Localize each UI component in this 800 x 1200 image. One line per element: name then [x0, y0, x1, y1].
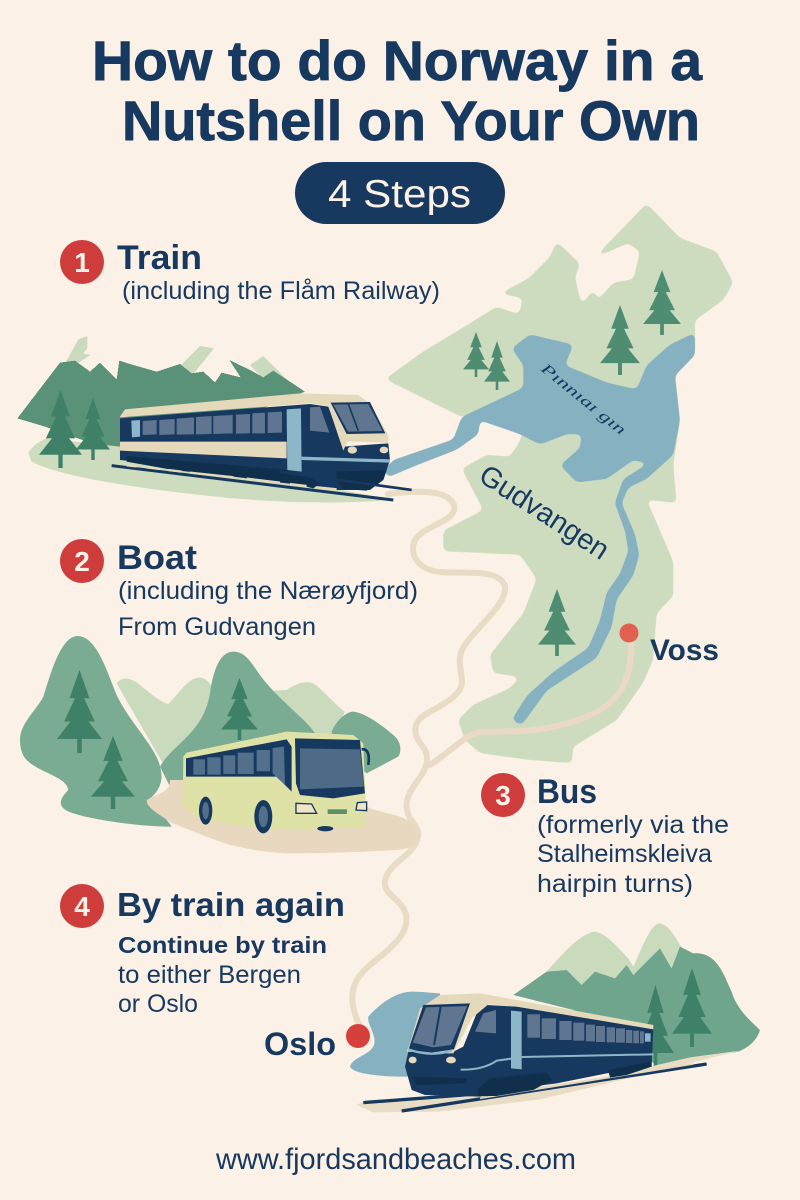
- hills and road: [20, 636, 420, 853]
- marker: Oslo: [264, 1024, 370, 1062]
- number badge 1: 1: [74, 247, 90, 278]
- roof: [407, 993, 653, 1053]
- step 4: By train again: [60, 884, 345, 1018]
- rails: [363, 1094, 477, 1103]
- door: [287, 408, 302, 472]
- title: [92, 29, 703, 152]
- marker: Voss: Voss: [650, 634, 719, 667]
- step 2 heading: Boat: [117, 539, 197, 577]
- body: [405, 1005, 653, 1097]
- step 1 description: (including the Flåm Railway): [122, 277, 440, 305]
- train: [112, 393, 412, 500]
- windshield: [295, 738, 365, 798]
- roof: [120, 393, 388, 451]
- step 2: Boat: [60, 539, 418, 641]
- step 1 heading: Train: [117, 239, 202, 277]
- headlights and grille: [296, 803, 317, 813]
- rails: [112, 465, 412, 500]
- train: [357, 993, 740, 1112]
- stripe: [120, 442, 287, 458]
- bus: [183, 732, 369, 833]
- scene: bus: [20, 636, 420, 853]
- map trees: [463, 270, 681, 656]
- wheels: [199, 797, 212, 825]
- windows: [143, 407, 329, 435]
- step 3 heading: Bus: [537, 773, 597, 811]
- windscreen: [408, 1003, 470, 1053]
- badge: 4 Steps: 4 Steps: [328, 173, 471, 216]
- number badge 4: 4: [74, 891, 90, 922]
- number badge 2: 2: [74, 546, 90, 577]
- map land: [385, 203, 733, 763]
- website url: www.fjordsandbeaches.com: [215, 1143, 576, 1176]
- marker: Oslo: Oslo: [264, 1026, 336, 1062]
- trees: [39, 390, 110, 468]
- mountains: [17, 336, 393, 502]
- step 4 description: Continue by train: [118, 932, 327, 958]
- number badge 3: [481, 773, 525, 817]
- headlights: [348, 446, 357, 454]
- badge: 4 Steps: [295, 162, 505, 224]
- number badge 3: 3: [495, 780, 511, 811]
- mirror: [362, 749, 369, 765]
- label: Gudvangen: Gudvangen: [473, 459, 615, 566]
- number badge 2: [60, 539, 104, 583]
- headlights: [409, 1057, 417, 1063]
- scene: train 1: [17, 336, 412, 502]
- number badge 4: [60, 884, 104, 928]
- lake label: Pınnıaɪ gın: [536, 360, 628, 439]
- trees: [637, 968, 712, 1067]
- map: fjord region: [383, 203, 733, 763]
- step 2 description: [118, 577, 418, 641]
- step 3 description: hairpin turns): [537, 870, 693, 898]
- step 4 heading: By train again: [117, 886, 345, 923]
- step 3 description: Stalheimskleiva: [537, 840, 712, 868]
- title: Nutshell on Your Own: [122, 89, 700, 152]
- step 1: Train: [60, 239, 440, 305]
- step 4 description: [118, 932, 327, 1018]
- map river and lake: [383, 333, 695, 725]
- step 3 description: (formerly via the: [537, 811, 729, 839]
- route line: [352, 492, 631, 1032]
- body: [120, 404, 390, 490]
- scene: train 2: [350, 923, 760, 1112]
- trees: [57, 670, 258, 809]
- body: [183, 732, 367, 830]
- number badge 1: [60, 240, 104, 284]
- track bed: [357, 1051, 740, 1112]
- step 4 description: to either Bergen: [118, 961, 301, 989]
- step 2 description: From Gudvangen: [118, 613, 316, 641]
- step 3 description: [537, 811, 729, 898]
- door and stripe: [511, 1011, 522, 1069]
- windows: [475, 1010, 644, 1043]
- step 3: Bus: [481, 773, 729, 898]
- water, mountains: [350, 923, 760, 1077]
- step 2 description: (including the Nærøyfjord): [118, 577, 418, 605]
- title: How to do Norway in a: [92, 29, 703, 92]
- side windows: [186, 739, 292, 792]
- step 4 description: or Oslo: [118, 990, 198, 1018]
- marker: Voss: [620, 624, 719, 667]
